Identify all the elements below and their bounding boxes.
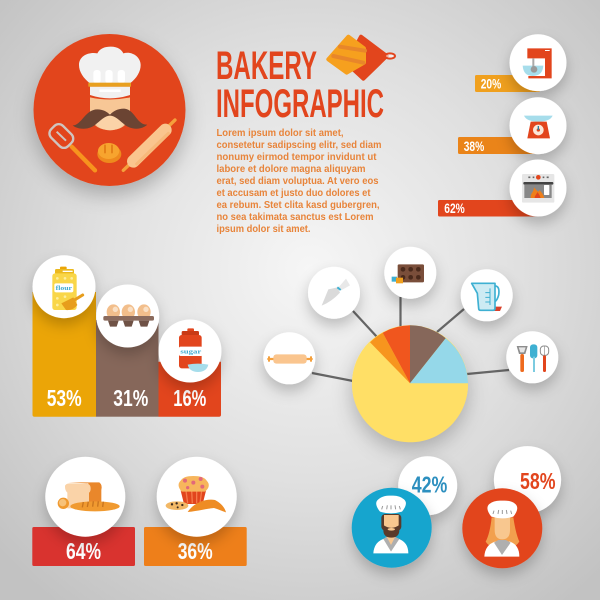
bar chart: ingredients <box>32 255 222 417</box>
pie chart with tool callouts <box>263 247 558 442</box>
icon: flour jar: flour <box>56 285 72 292</box>
icon: bread <box>58 482 120 511</box>
icon: female chef <box>484 501 519 557</box>
icon: whisk <box>47 122 95 170</box>
bar: flour 53%: 53% <box>47 385 82 411</box>
intro text block: labore et dolore magna aliquyam <box>216 163 366 175</box>
equipment stat: oven 62%: 62% <box>444 200 465 216</box>
bar: sugar 16%: 16% <box>173 385 206 411</box>
pie <box>352 325 468 442</box>
stat: bread 64% <box>32 457 135 566</box>
stat: pastries 36%: 36% <box>178 538 213 564</box>
icon: sugar jar: sugar <box>180 348 202 355</box>
icon: sugar jar <box>158 320 222 382</box>
intro text block: et accusam et justo duo dolores et <box>216 187 371 199</box>
equipment stat: scale 38%: 38% <box>464 138 485 154</box>
intro text block: consetetur sadipscing elitr, sed diam <box>216 139 382 151</box>
stat: bread 64%: 64% <box>66 538 101 564</box>
intro text block: no sea takimata sanctus est Lorem <box>216 211 374 223</box>
icon: oven mitts <box>328 37 395 79</box>
icon: pastries <box>166 476 226 512</box>
icon: piping bag callout <box>308 267 360 319</box>
stat: female chef 58% <box>462 446 561 568</box>
icon: chef hat <box>79 47 141 98</box>
intro text block: erat, sed diam voluptua. At vero eos <box>216 175 379 187</box>
main chef badge <box>34 34 186 186</box>
icon: utensils callout <box>506 331 558 383</box>
icon: moustache <box>73 109 147 129</box>
bar: sugar 16% <box>158 362 221 417</box>
title: INFOGRAPHIC <box>216 82 384 126</box>
stat: male chef 42%: 42% <box>412 472 447 498</box>
intro text block: Lorem ipsum dolor sit amet, <box>216 127 344 139</box>
icon: baking tray callout <box>384 247 436 299</box>
title <box>216 44 384 126</box>
connector lines <box>312 297 509 381</box>
icon: egg tray <box>96 284 159 348</box>
intro text block: ea rebum. Stet clita kasd gubergren, <box>216 199 380 211</box>
equipment stat: oven 62% <box>438 160 566 216</box>
intro text block <box>216 127 382 235</box>
stat: female chef 58%: 58% <box>520 468 556 494</box>
icon: rolling pin <box>123 120 175 170</box>
intro text block: ipsum dolor sit amet. <box>216 223 311 235</box>
stat: pastries 36% <box>144 457 247 566</box>
icon: chef face <box>90 97 130 130</box>
equipment stat: mixer 20%: 20% <box>481 75 502 91</box>
icon: male chef <box>373 496 408 553</box>
title: BAKERY <box>216 44 317 88</box>
icon: bun <box>97 143 121 163</box>
intro text block: nonumy eirmod tempor invidunt ut <box>216 151 377 163</box>
icon: rolling pin callout <box>263 332 315 384</box>
bar: flour 53% <box>32 292 96 417</box>
bar: eggs 31% <box>96 320 158 417</box>
icon: flour jar <box>32 255 96 318</box>
bar: eggs 31%: 31% <box>113 385 148 411</box>
stat: male chef 42% <box>352 456 457 568</box>
equipment stat: scale 38% <box>458 97 566 154</box>
equipment stat: mixer 20% <box>475 34 566 92</box>
icon: measuring jug callout <box>461 269 513 321</box>
